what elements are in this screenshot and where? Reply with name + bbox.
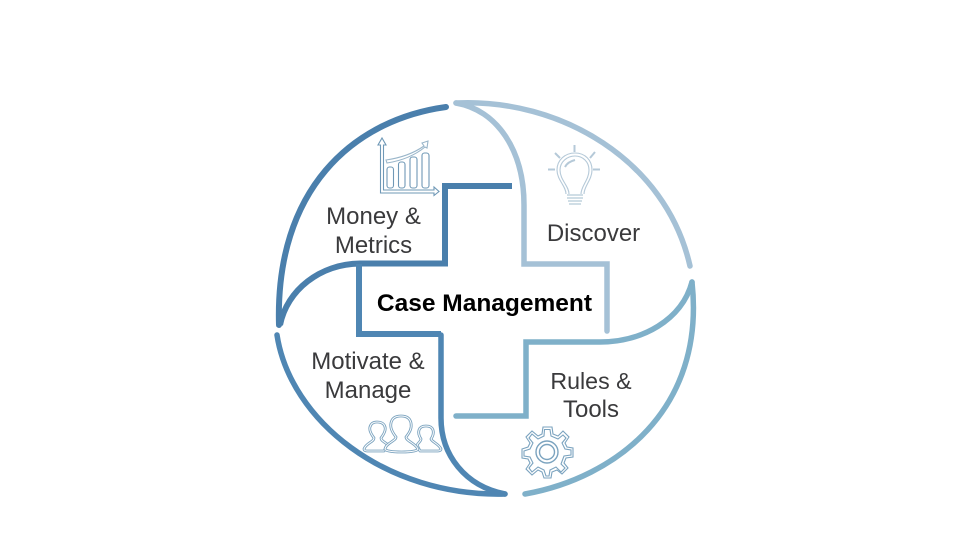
icon: bar chart with arrow	[378, 138, 439, 196]
label: rules and tools	[550, 368, 632, 423]
icon: group of people	[364, 416, 441, 452]
panel: money and metrics outline	[279, 107, 512, 334]
icon: light bulb	[548, 145, 600, 204]
label: rules and tools: Tools	[563, 396, 619, 423]
label: discover: Discover	[547, 220, 640, 247]
label: money and metrics	[326, 203, 421, 259]
person: right	[417, 426, 441, 451]
panel: discover outline	[456, 103, 690, 331]
panel: motivate and manage outline	[277, 335, 505, 494]
person: left	[364, 422, 388, 451]
heading: case management: Case Management	[377, 290, 592, 317]
label: money and metrics: Money &	[326, 203, 421, 230]
label: motivate and manage: Manage	[325, 377, 411, 404]
label: motivate and manage: Motivate &	[311, 348, 425, 375]
icon: gear	[522, 427, 573, 478]
label: motivate and manage	[311, 348, 425, 404]
panel: rules and tools outline	[456, 282, 693, 494]
label: rules and tools: Rules &	[550, 368, 632, 394]
label: money and metrics: Metrics	[335, 232, 412, 259]
person: centre	[385, 416, 418, 452]
